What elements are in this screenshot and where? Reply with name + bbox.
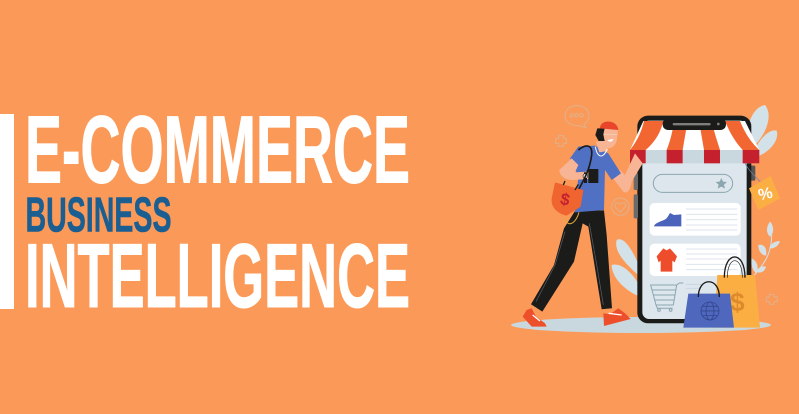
product card: shirt [650, 244, 741, 276]
phone screen [642, 121, 747, 319]
illustration: leaves behind phone left [612, 239, 642, 297]
title: INTELLIGENCE: INTELLIGENCE [25, 226, 410, 327]
speech bubble icon [565, 106, 589, 128]
orange shopping bag: $ [730, 287, 745, 317]
heart icon [612, 198, 629, 215]
shoes [523, 308, 547, 327]
face [601, 128, 618, 148]
percent tag [745, 163, 780, 210]
orange shopping bag [714, 257, 760, 328]
illustration: branch bottom right [751, 222, 780, 278]
subtitle: BUSINESS: BUSINESS [26, 188, 172, 242]
right arm [612, 153, 643, 192]
blue shopping bag [683, 282, 734, 328]
left phone buttons [634, 173, 638, 190]
white accent bar [0, 114, 14, 309]
percent tag: % [757, 185, 774, 204]
awning [630, 121, 759, 163]
product card: shoe [650, 203, 741, 236]
phone side buttons [750, 166, 755, 181]
illustration: leaves top right [748, 105, 777, 158]
trousers [531, 210, 612, 312]
illustration: shopper character: $ [559, 189, 572, 210]
gold chain [566, 212, 579, 224]
shopping cart [651, 283, 703, 311]
neck and necklace [596, 140, 607, 152]
icon: small plus right [766, 294, 777, 304]
title: E-COMMERCE: E-COMMERCE [25, 96, 410, 204]
t-shirt [570, 146, 621, 212]
phone notch [663, 118, 726, 130]
phone body [637, 116, 751, 323]
orange money bag [552, 182, 583, 216]
search bar [653, 174, 733, 192]
illustration: shopper character [523, 106, 643, 327]
ground shadow [511, 317, 771, 333]
plus icon [556, 136, 566, 146]
illustration: smartphone storefront [630, 116, 780, 328]
left arm with phone and watch [559, 158, 597, 180]
bag strap [578, 146, 592, 190]
